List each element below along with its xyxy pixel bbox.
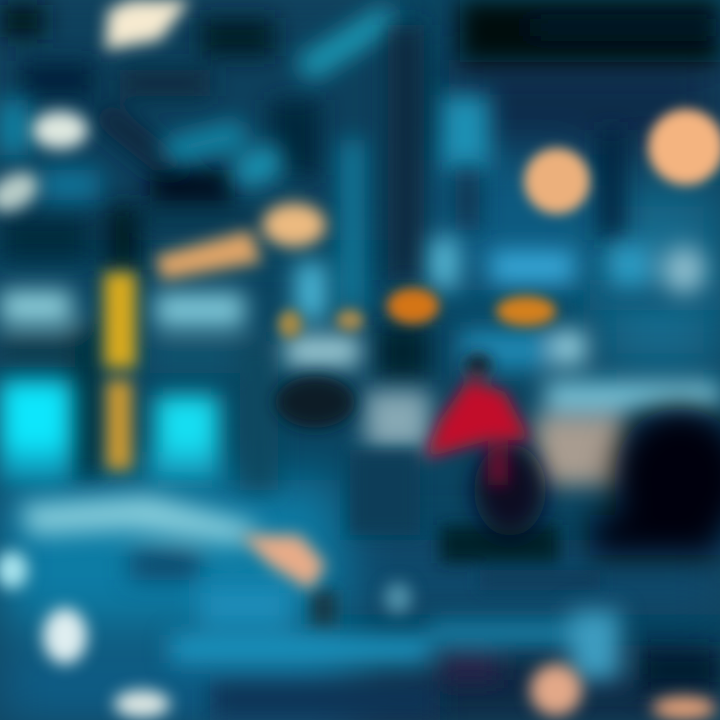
white highlights bbox=[0, 0, 190, 718]
dark streaks, upper area bbox=[0, 5, 330, 270]
orange lights bbox=[278, 288, 556, 338]
peach diagonal bar bbox=[155, 203, 326, 280]
right-hand pale blue patches bbox=[285, 238, 720, 485]
teal diagonal strokes, upper area bbox=[0, 5, 490, 310]
dark mid shapes bbox=[275, 376, 600, 630]
peach lower accents bbox=[240, 535, 716, 720]
dark figure body bbox=[474, 444, 546, 536]
dark vertical pillars bbox=[378, 25, 720, 380]
top-right black band bbox=[460, 0, 720, 62]
cyan glow areas bbox=[0, 380, 220, 480]
lower pale bands bbox=[20, 495, 720, 720]
red figure bbox=[425, 353, 530, 485]
large black shape at right bbox=[590, 408, 720, 555]
peach circles bbox=[524, 109, 720, 214]
yellow vertical bar bbox=[104, 272, 136, 470]
light bands on the left bbox=[0, 262, 327, 490]
